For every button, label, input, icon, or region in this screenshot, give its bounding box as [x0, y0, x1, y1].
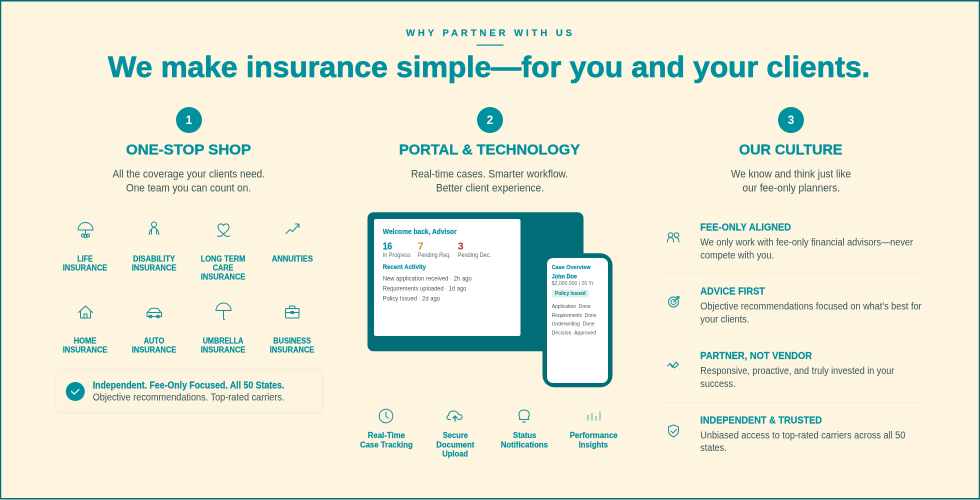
- item: independent and trusted: Unbiased access to top-rated carriers across all 50: [700, 430, 906, 441]
- description: culture: [731, 168, 851, 194]
- recent activity list: Requirements uploaded · 1d ago: [383, 286, 467, 293]
- step badge 1: 1: [186, 115, 193, 127]
- feature: real-time case tracking: [360, 409, 413, 449]
- item: advice first: ADVICE FIRST: [700, 287, 765, 298]
- stat: pending requirements: [418, 241, 451, 259]
- step badge 2: 2: [487, 115, 493, 127]
- description: one-stop shop: One team you can count on.: [126, 182, 251, 194]
- product: auto insurance: [132, 308, 177, 355]
- item: partner, not vendor: PARTNER, NOT VENDOR: [700, 351, 813, 362]
- case status list: Underwriting Done: [552, 322, 595, 328]
- tablet mockup: [368, 212, 584, 351]
- item: fee-only aligned: We only work with fee-only financial advisors—never: [700, 238, 914, 249]
- product: disability insurance: DISABILITY: [133, 254, 176, 263]
- eyebrow: WHY PARTNER WITH US: [406, 28, 572, 39]
- description: portal: Better client experience.: [436, 182, 544, 194]
- item: independent and trusted: INDEPENDENT & TRUSTED: [700, 415, 822, 426]
- item: fee-only aligned: FEE-ONLY ALIGNED: [700, 223, 791, 234]
- feature: performance insights: Performance: [570, 431, 618, 440]
- feature: secure document upload: Secure: [443, 431, 469, 440]
- heading: one-stop shop: ONE-STOP SHOP: [126, 142, 251, 158]
- description: one-stop shop: All the coverage your clients need.: [112, 168, 265, 180]
- stat: pending decision: Pending Dec.: [458, 253, 491, 259]
- case status list: [552, 304, 597, 336]
- phone mockup: John Doe: [552, 273, 577, 280]
- item: advice first: your clients.: [700, 315, 749, 326]
- feature: status notifications: Status: [513, 431, 537, 440]
- product: life insurance: LIFE: [77, 254, 93, 263]
- description: culture: We know and think just like: [731, 168, 851, 180]
- item: fee-only aligned: [668, 223, 914, 262]
- product: auto insurance: INSURANCE: [132, 346, 177, 355]
- step badge 2: [477, 107, 503, 133]
- phone mockup: Case Overview: [552, 265, 591, 271]
- panel: portal and technology: [360, 107, 618, 459]
- case status list: Requirements Done: [552, 313, 597, 319]
- item: advice first: Objective recommendations focused on what's best for: [700, 302, 922, 313]
- feature: secure document upload: Document: [436, 440, 475, 449]
- step badge 1: [176, 107, 202, 133]
- tablet mockup: Recent Activity: [383, 264, 426, 271]
- feature: status notifications: Notifications: [501, 440, 549, 449]
- description: portal: Real-time cases. Smarter workflow.: [411, 168, 568, 180]
- feature: performance insights: [570, 412, 618, 449]
- product: long term care insurance: LONG TERM: [201, 254, 246, 263]
- case status list: Decision Approved: [552, 330, 596, 336]
- product: disability insurance: [132, 222, 177, 272]
- stat: in progress: In Progress: [383, 253, 411, 259]
- feature: secure document upload: [436, 411, 475, 459]
- description: one-stop shop: [112, 168, 265, 194]
- item: independent and trusted: [668, 415, 906, 454]
- product: umbrella insurance: [201, 303, 246, 355]
- phone mockup: $2,000,000 | 20 Yr: [552, 281, 594, 287]
- product: home insurance: [63, 306, 108, 355]
- recent activity list: [383, 276, 472, 303]
- product: business insurance: [270, 306, 315, 355]
- feature: real-time case tracking: Case Tracking: [360, 440, 413, 449]
- stat: pending requirements: Pending Req.: [418, 253, 451, 259]
- panel: one-stop shop: [55, 107, 323, 413]
- product: business insurance: INSURANCE: [270, 346, 315, 355]
- product: business insurance: BUSINESS: [273, 337, 312, 346]
- item: partner, not vendor: success.: [700, 379, 736, 390]
- item: independent and trusted: states.: [700, 443, 727, 454]
- stat: pending decision: 3: [458, 241, 464, 253]
- feature: performance insights: Insights: [579, 440, 609, 449]
- item: partner, not vendor: Responsive, proactive, and truly invested in your: [700, 366, 895, 377]
- description: culture: our fee-only planners.: [742, 182, 840, 194]
- status pill: Policy Issued: [555, 291, 586, 297]
- panel: our culture: [658, 107, 925, 454]
- recent activity list: Policy Issued · 2d ago: [383, 296, 440, 303]
- product: home insurance: HOME: [74, 337, 97, 346]
- product: long term care insurance: INSURANCE: [201, 272, 246, 281]
- icon: check badge: [66, 382, 85, 401]
- item: partner, not vendor: [668, 351, 895, 390]
- title: We make insurance simple—for you and your clients.: [108, 51, 870, 84]
- product: life insurance: INSURANCE: [63, 263, 108, 272]
- feature: secure document upload: Upload: [442, 450, 468, 459]
- stat: pending requirements: 7: [418, 241, 424, 253]
- phone mockup: [542, 253, 612, 387]
- feature: real-time case tracking: Real-Time: [368, 431, 406, 440]
- product: umbrella insurance: UMBRELLA: [203, 337, 244, 346]
- feature: status notifications: [501, 410, 549, 449]
- callout: independent: Objective recommendations. Top-rated carriers.: [93, 393, 284, 404]
- heading: portal and technology: PORTAL & TECHNOLOGY: [399, 142, 580, 158]
- product: disability insurance: INSURANCE: [132, 263, 177, 272]
- case status list: Application Done: [552, 304, 591, 310]
- item: advice first: [668, 287, 922, 326]
- product: annuities: [272, 224, 314, 263]
- stat: in progress: [383, 241, 411, 259]
- product: annuities: ANNUITIES: [272, 254, 314, 263]
- step badge 3: 3: [788, 115, 794, 127]
- heading: our culture: OUR CULTURE: [739, 142, 843, 158]
- step badge 3: [778, 107, 804, 133]
- product: home insurance: INSURANCE: [63, 346, 108, 355]
- product: long term care insurance: [201, 224, 246, 281]
- product: auto insurance: AUTO: [144, 337, 164, 346]
- stat: in progress: 16: [383, 241, 392, 253]
- description: portal: [411, 168, 568, 194]
- tablet mockup: Welcome back, Advisor: [383, 227, 457, 236]
- recent activity list: New application received · 2h ago: [383, 276, 472, 283]
- product: long term care insurance: CARE: [213, 263, 234, 272]
- stat: pending decision: [458, 241, 491, 259]
- product: life insurance: [63, 223, 108, 272]
- callout: independent: Independent. Fee-Only Focused. All 50 States.: [93, 381, 284, 392]
- item: fee-only aligned: compete with you.: [700, 251, 774, 262]
- callout: independent: [55, 370, 323, 413]
- product: umbrella insurance: INSURANCE: [201, 346, 246, 355]
